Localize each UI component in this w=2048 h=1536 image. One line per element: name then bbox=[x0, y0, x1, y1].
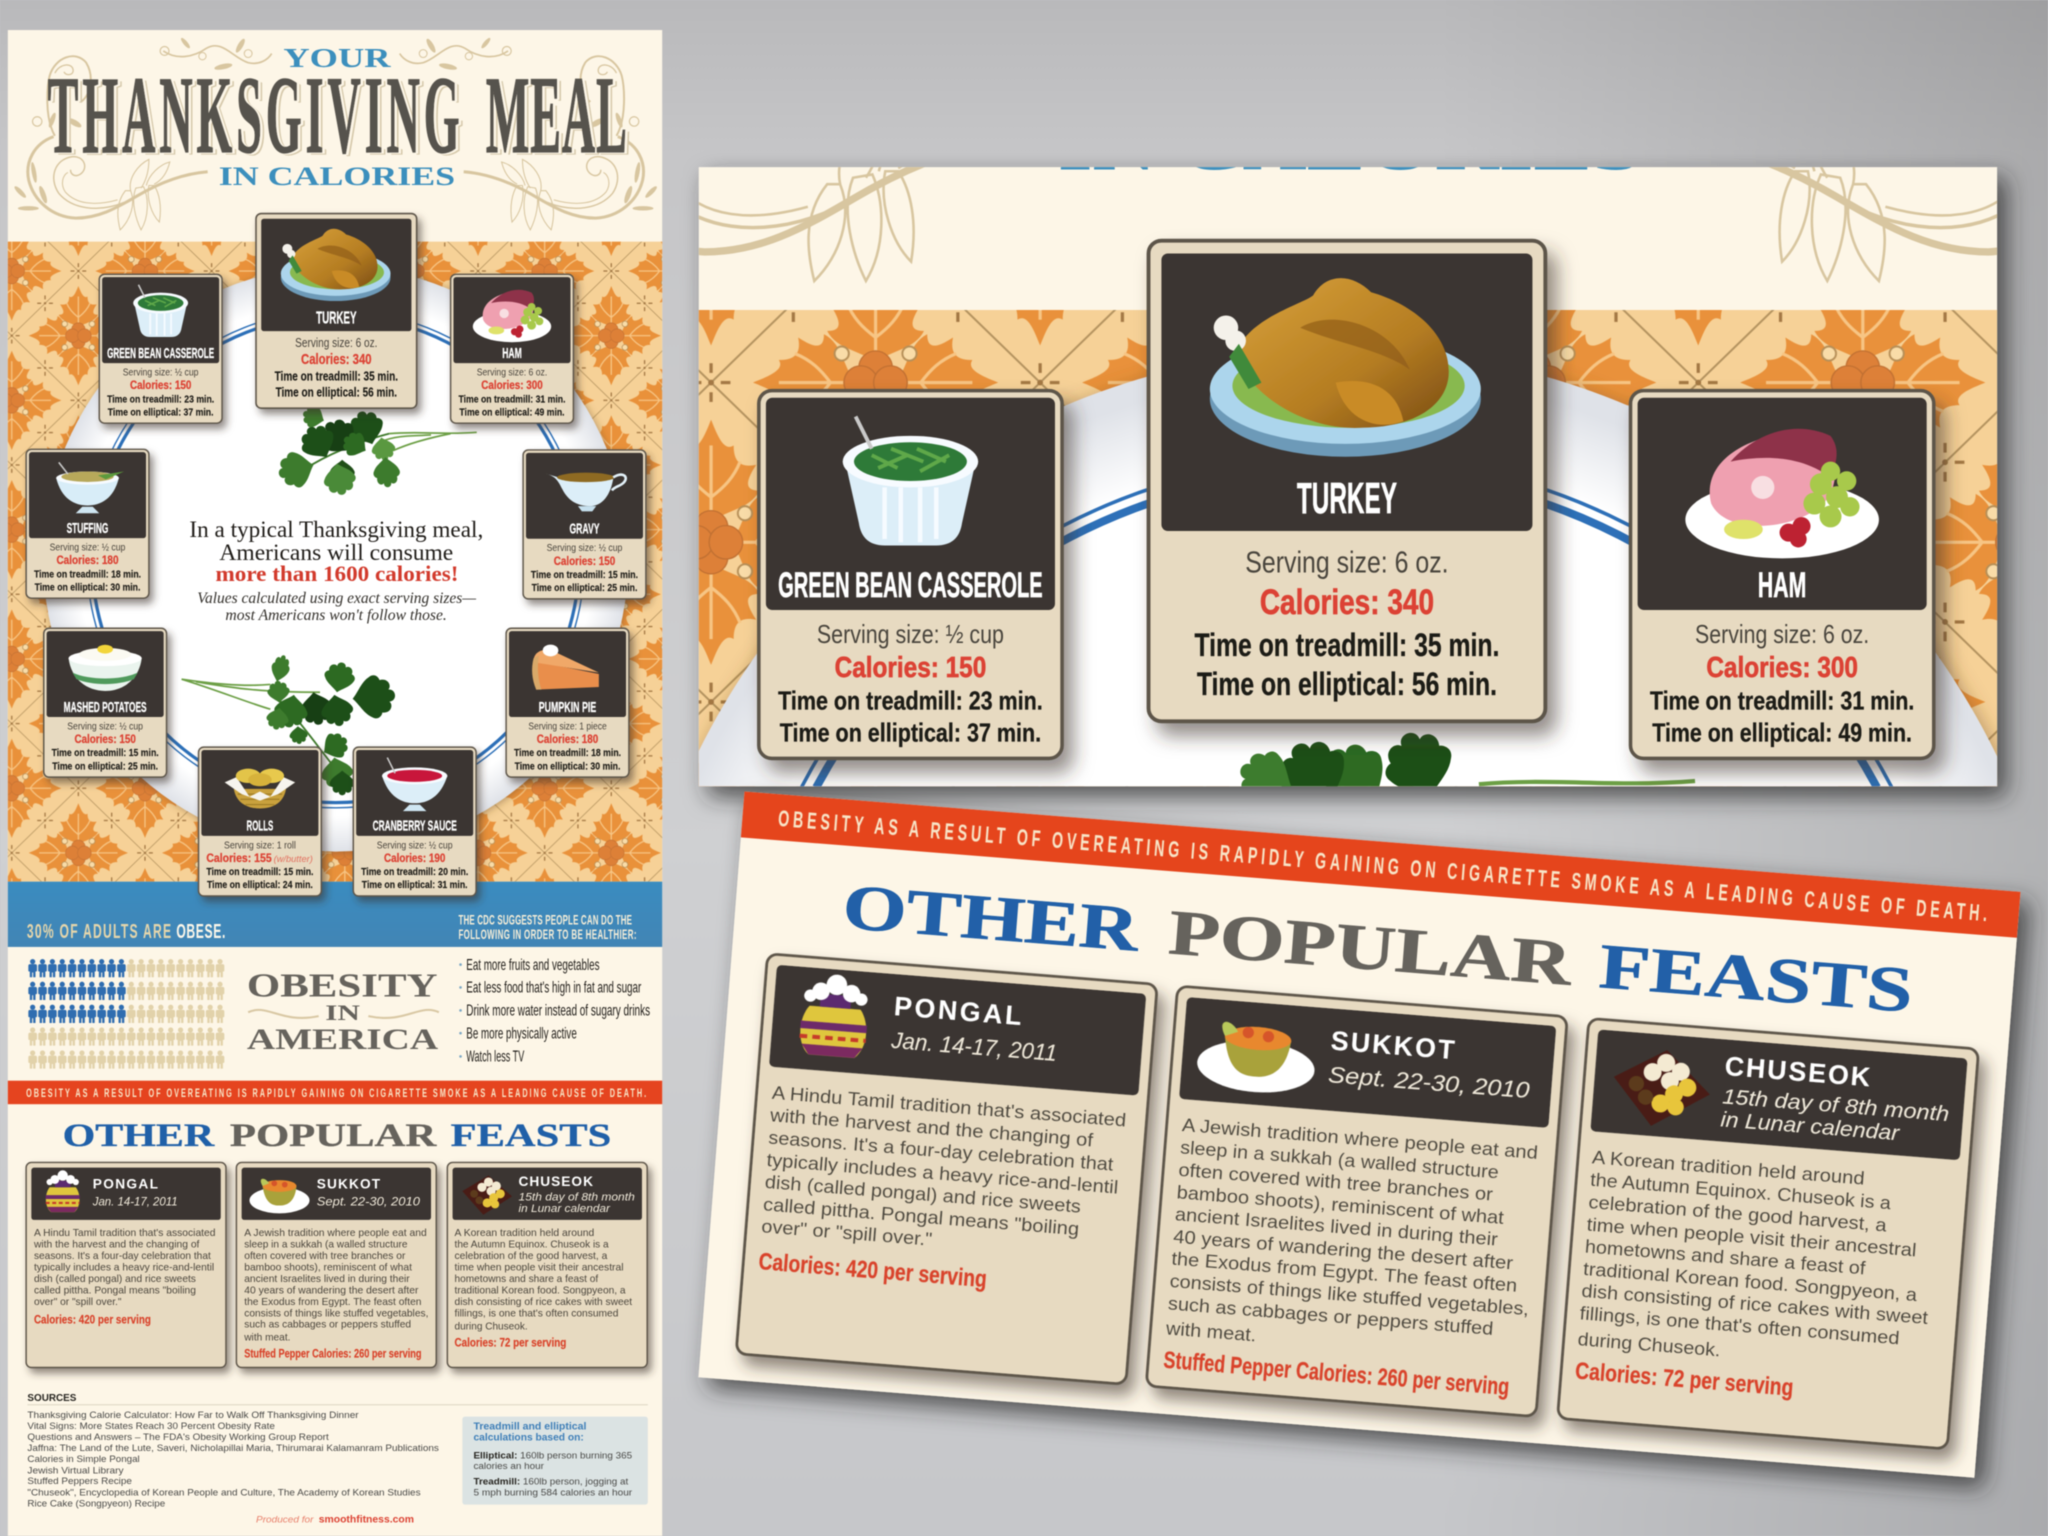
feast card: pongal: seasons. It's a four-day celebration that bbox=[34, 1251, 211, 1262]
feast card: pongal: dish (called pongal) and rice sweets bbox=[34, 1274, 196, 1285]
credit: smoothfitness.com bbox=[319, 1514, 414, 1525]
card: mashed potatoes: Time on elliptical: 25 min. bbox=[52, 761, 158, 772]
credit bbox=[256, 1514, 414, 1525]
sources: Jaffna: The Land of the Lute, Saveri, Nicholapillai Maria, Thirumarai Kalamanram Publications bbox=[27, 1442, 439, 1453]
card: gravy: GRAVY bbox=[569, 522, 600, 538]
list: CDC suggestions: Be more physically active bbox=[466, 1025, 577, 1042]
icon: pongal pot bbox=[46, 1170, 80, 1212]
card: turkey: Serving size: 6 oz. bbox=[1245, 544, 1449, 579]
feast card: sukkot: Sept. 22-30, 2010 bbox=[317, 1196, 420, 1209]
card: green bean casserole: Calories: 150 bbox=[835, 652, 986, 684]
list: CDC suggestions: Watch less TV bbox=[466, 1049, 525, 1066]
feast card: sukkot: often covered with tree branches or bbox=[1178, 1160, 1494, 1205]
feast card: sukkot bbox=[1146, 986, 1567, 1417]
card: turkey: Serving size: 6 oz. bbox=[295, 336, 377, 350]
callout: calculation basis: calories an hour bbox=[473, 1461, 544, 1471]
heading: obesity in america: AMERICA bbox=[247, 1023, 439, 1056]
card: green bean casserole: Serving size: ½ cup bbox=[817, 621, 1004, 649]
feast card: pongal bbox=[736, 954, 1157, 1384]
card: pumpkin pie bbox=[506, 628, 629, 777]
feast card: pongal: called pittha. Pongal means "boiling bbox=[34, 1285, 196, 1296]
feast card: sukkot: with meat. bbox=[1164, 1319, 1257, 1347]
feast card: sukkot: ancient Israelites lived in during their bbox=[244, 1274, 411, 1285]
panel: zoomed meal cards bbox=[690, 160, 2024, 815]
feast card: sukkot: Stuffed Pepper Calories: 260 per serving bbox=[244, 1347, 421, 1361]
feast card: chuseok bbox=[447, 1162, 647, 1368]
card: ham: Calories: 300 bbox=[481, 379, 543, 392]
card: ham: Time on treadmill: 31 min. bbox=[1650, 687, 1914, 715]
callout: calculation basis bbox=[462, 1417, 648, 1505]
card: turkey: Time on elliptical: 56 min. bbox=[1197, 666, 1497, 702]
icon: casserole bbox=[133, 285, 188, 337]
card: mashed potatoes bbox=[44, 628, 167, 777]
feast card: sukkot: Sept. 22-30, 2010 bbox=[1327, 1061, 1531, 1103]
card: ham: HAM bbox=[1758, 565, 1806, 605]
red banner bbox=[8, 1081, 662, 1104]
icon: stuffed pepper bbox=[249, 1179, 310, 1213]
card: gravy: Serving size: ½ cup bbox=[547, 543, 623, 554]
feast card: pongal: over" or "spill over." bbox=[761, 1217, 933, 1251]
card: pumpkin pie: Calories: 180 bbox=[537, 733, 599, 746]
card: stuffing: Calories: 180 bbox=[56, 554, 119, 567]
card: gravy: Time on treadmill: 15 min. bbox=[531, 570, 638, 581]
card: pumpkin pie: Time on elliptical: 30 min. bbox=[515, 761, 620, 772]
feast card: sukkot: sleep in a sukkah (a walled structure bbox=[1179, 1137, 1499, 1183]
card: ham: HAM bbox=[502, 346, 522, 362]
card: rolls: Calories: 155 bbox=[206, 852, 272, 865]
card: ham: Time on elliptical: 49 min. bbox=[459, 407, 565, 418]
card: turkey: Time on treadmill: 35 min. bbox=[275, 369, 398, 384]
pictogram: 30 of 100 adults bbox=[28, 959, 224, 1069]
red banner: OBESITY AS A RESULT OF OVEREATING IS RAPIDLY GAINING ON CIGARETTE SMOKE AS A LEADING CAUSE OF DEATH. bbox=[26, 1087, 646, 1100]
center message: more than 1600 calories! bbox=[216, 561, 458, 586]
title: YOUR bbox=[283, 43, 392, 73]
icon: pongal pot bbox=[798, 972, 871, 1059]
card: cranberry sauce: Serving size: ½ cup bbox=[377, 840, 453, 851]
card: turkey: Calories: 340 bbox=[301, 352, 372, 368]
feast card: chuseok: 15th day of 8th month bbox=[1722, 1084, 1950, 1126]
feast card: chuseok: CHUSEOK bbox=[519, 1174, 593, 1189]
feast card: sukkot: with meat. bbox=[243, 1333, 290, 1344]
blue band bbox=[8, 882, 662, 947]
card: stuffing: STUFFING bbox=[67, 521, 108, 537]
card: turkey bbox=[256, 214, 417, 408]
feast card: chuseok: 15th day of 8th month bbox=[519, 1191, 635, 1203]
callout: calculation basis: Treadmill: 160lb person, jogging at bbox=[473, 1477, 629, 1487]
feast card: chuseok: CHUSEOK bbox=[1724, 1051, 1872, 1093]
card: pumpkin pie: PUMPKIN PIE bbox=[539, 700, 596, 716]
card: ham: Serving size: 6 oz. bbox=[1695, 621, 1869, 649]
callout: calculation basis: Elliptical: 160lb person burning 365 bbox=[473, 1450, 632, 1460]
icon: casserole bbox=[843, 416, 978, 546]
feast card: sukkot: bamboo shoots), reminiscent of what bbox=[244, 1263, 412, 1274]
parsley top bbox=[274, 403, 477, 498]
feast card: chuseok: the Autumn Equinox. Chuseok is a bbox=[1590, 1170, 1892, 1214]
obesity band text bbox=[27, 913, 636, 943]
feast card: sukkot bbox=[236, 1162, 436, 1368]
feast card: chuseok: time when people visit their ancestral bbox=[1586, 1214, 1917, 1261]
feast card: chuseok: during Chuseok. bbox=[455, 1322, 528, 1333]
feast card: pongal: seasons. It's a four-day celebration that bbox=[768, 1127, 1115, 1176]
feast card: pongal: typically includes a heavy rice-and-lentil bbox=[766, 1150, 1119, 1198]
card: green bean casserole: GREEN BEAN CASSEROLE bbox=[107, 346, 214, 362]
panel: full infographic bbox=[8, 30, 662, 1536]
card: ham: Serving size: 6 oz. bbox=[477, 368, 547, 379]
feast card: pongal: A Hindu Tamil tradition that's associated bbox=[771, 1083, 1127, 1131]
heading: other popular feasts: POPULAR bbox=[1166, 896, 1575, 999]
card: rolls: (w/butter) bbox=[274, 854, 313, 864]
feast card: pongal: typically includes a heavy rice-and-lentil bbox=[34, 1263, 214, 1274]
feast card: chuseok bbox=[1558, 1018, 1979, 1449]
icon: ham bbox=[1685, 429, 1879, 558]
feast card: sukkot: SUKKOT bbox=[317, 1177, 381, 1192]
heading: other popular feasts bbox=[63, 1118, 611, 1154]
feast card: sukkot: often covered with tree branches or bbox=[244, 1251, 406, 1262]
heading: other popular feasts: OTHER bbox=[840, 871, 1142, 965]
card: green bean casserole: Calories: 150 bbox=[130, 379, 192, 392]
feast card: chuseok: fillings, is one that's often consumed bbox=[455, 1308, 618, 1319]
card: cranberry sauce bbox=[353, 747, 476, 896]
feast card: pongal: over" or "spill over." bbox=[34, 1297, 122, 1308]
feast card: chuseok: the Autumn Equinox. Chuseok is a bbox=[455, 1240, 609, 1251]
card: green bean casserole bbox=[99, 274, 222, 423]
card: green bean casserole: GREEN BEAN CASSEROLE bbox=[778, 565, 1043, 605]
icon: rice cakes bbox=[1610, 1046, 1713, 1130]
card: rolls: Serving size: 1 roll bbox=[224, 840, 296, 851]
feast card: chuseok: A Korean tradition held around bbox=[1591, 1147, 1865, 1190]
card: green bean casserole bbox=[759, 391, 1062, 758]
feast card: pongal: PONGAL bbox=[93, 1177, 158, 1192]
center message: most Americans won't follow those. bbox=[225, 607, 447, 624]
callout: calculation basis: Treadmill and elliptical bbox=[473, 1421, 586, 1432]
feast card: sukkot: SUKKOT bbox=[1330, 1025, 1456, 1065]
center message: In a typical Thanksgiving meal, bbox=[189, 517, 483, 542]
feast card: chuseok: time when people visit their ancestral bbox=[455, 1263, 624, 1274]
center message: Americans will consume bbox=[219, 540, 453, 565]
feast card: sukkot: bamboo shoots), reminiscent of what bbox=[1176, 1182, 1505, 1229]
parsley bbox=[1240, 732, 1696, 788]
card: green bean casserole: Time on treadmill: 23 min. bbox=[107, 394, 214, 405]
card: cranberry sauce: CRANBERRY SAUCE bbox=[373, 819, 457, 835]
feast card: chuseok: dish consisting of rice cakes with sweet bbox=[455, 1297, 632, 1308]
feast card: pongal: called pittha. Pongal means "boiling bbox=[762, 1194, 1080, 1240]
plate bbox=[43, 266, 628, 852]
card: mashed potatoes: Calories: 150 bbox=[74, 733, 136, 746]
list: CDC suggestions: Eat less food that's high in fat and sugar bbox=[466, 980, 641, 997]
list: CDC suggestions: Drink more water instead of sugary drinks bbox=[466, 1003, 650, 1020]
card: ham bbox=[1631, 391, 1934, 758]
sources: SOURCES bbox=[27, 1393, 77, 1404]
icon: turkey bbox=[281, 229, 391, 301]
feast card: chuseok: Calories: 72 per serving bbox=[1574, 1358, 1794, 1402]
icon: turkey bbox=[1210, 278, 1481, 457]
feast card: chuseok: Calories: 72 per serving bbox=[455, 1336, 566, 1350]
feast card: pongal: dish (called pongal) and rice sweets bbox=[764, 1172, 1082, 1218]
feast card: sukkot: consists of things like stuffed vegetables, bbox=[1169, 1271, 1530, 1320]
icon: gravy bbox=[545, 473, 626, 511]
sources: Stuffed Peppers Recipe bbox=[27, 1475, 132, 1486]
feast card: pongal bbox=[26, 1162, 226, 1368]
feast card: chuseok: during Chuseok. bbox=[1577, 1330, 1721, 1362]
wallpaper bbox=[8, 242, 662, 882]
feast card: chuseok: A Korean tradition held around bbox=[455, 1228, 594, 1239]
title: THANKSGIVING bbox=[48, 56, 460, 177]
header ornament bbox=[13, 37, 658, 230]
icon: rice cakes bbox=[462, 1176, 512, 1215]
panel: rotated feasts detail bbox=[698, 792, 2020, 1478]
card: gravy: Time on elliptical: 25 min. bbox=[532, 583, 637, 594]
feast card: sukkot: 40 years of wandering the desert after bbox=[1172, 1227, 1514, 1274]
card: green bean casserole: Time on elliptical: 37 min. bbox=[780, 720, 1041, 748]
parsley bottom bbox=[182, 653, 397, 795]
feast card: chuseok: fillings, is one that's often consumed bbox=[1579, 1304, 1900, 1350]
card: stuffing: Serving size: ½ cup bbox=[50, 543, 126, 554]
card: rolls bbox=[199, 747, 321, 896]
card: gravy bbox=[523, 450, 646, 599]
sources: Vital Signs: More States Reach 30 Percent Obesity Rate bbox=[27, 1420, 275, 1431]
icon: pumpkin pie bbox=[532, 645, 599, 690]
card: turkey: TURKEY bbox=[1297, 475, 1397, 523]
obesity band text: 30% OF ADULTS ARE bbox=[27, 920, 171, 943]
obesity band text: FOLLOWING IN ORDER TO BE HEALTHIER: bbox=[458, 928, 636, 943]
card: rolls: Time on treadmill: 15 min. bbox=[206, 867, 314, 878]
feast card: pongal: with the harvest and the changing of bbox=[33, 1240, 200, 1251]
feast card: pongal: Jan. 14-17, 2011 bbox=[890, 1027, 1058, 1066]
feast card: sukkot: ancient Israelites lived in during their bbox=[1174, 1204, 1499, 1251]
red banner: OBESITY AS A RESULT OF OVEREATING IS RAPIDLY GAINING ON CIGARETTE SMOKE AS A LEADING CAUSE OF DEATH. bbox=[777, 807, 1988, 927]
feast card: sukkot: such as cabbages or peppers stuffed bbox=[244, 1320, 411, 1331]
card: pumpkin pie: Time on treadmill: 18 min. bbox=[514, 748, 621, 759]
sources: Rice Cake (Songpyeon) Recipe bbox=[27, 1497, 165, 1508]
title: MEAL bbox=[486, 56, 627, 177]
card: turkey: Calories: 340 bbox=[1260, 582, 1434, 622]
card: ham: Calories: 300 bbox=[1706, 652, 1858, 684]
heading: other popular feasts: POPULAR bbox=[230, 1118, 437, 1154]
card: cranberry sauce: Calories: 190 bbox=[384, 852, 446, 865]
feast card: chuseok: celebration of the good harvest, a bbox=[455, 1251, 608, 1262]
sources: Thanksgiving Calorie Calculator: How Far to Walk Off Thanksgiving Dinner bbox=[27, 1409, 359, 1420]
heading: other popular feasts: OTHER bbox=[63, 1118, 215, 1154]
feast card: chuseok: traditional Korean food. Songpyeon, a bbox=[1582, 1259, 1918, 1306]
card: stuffing: Time on treadmill: 18 min. bbox=[34, 569, 141, 580]
heading: other popular feasts bbox=[840, 871, 1916, 1026]
feast card: sukkot: the Exodus from Egypt. The feast often bbox=[244, 1297, 421, 1308]
in calories heading clipped: IN CALORIES bbox=[1058, 112, 1642, 185]
feast card: pongal: A Hindu Tamil tradition that's associated bbox=[34, 1228, 216, 1239]
callout: calculation basis: 5 mph burning 584 calories an hour bbox=[473, 1488, 632, 1498]
sources: Questions and Answers – The FDA's Obesity Working Group Report bbox=[27, 1431, 329, 1442]
feast card: sukkot: such as cabbages or peppers stuffed bbox=[1167, 1293, 1494, 1340]
list: CDC suggestions: Eat more fruits and vegetables bbox=[466, 957, 600, 974]
heading: other popular feasts: FEASTS bbox=[1597, 930, 1916, 1026]
icon: mashed potatoes bbox=[69, 645, 142, 691]
card: pumpkin pie: Serving size: 1 piece bbox=[528, 721, 607, 732]
card: turkey: Time on treadmill: 35 min. bbox=[1195, 627, 1499, 663]
card: ham: Time on treadmill: 31 min. bbox=[458, 394, 566, 405]
card: mashed potatoes: MASHED POTATOES bbox=[64, 700, 147, 716]
sources: "Chuseok", Encyclopedia of Korean People and Culture, The Academy of Korean Studies bbox=[27, 1487, 421, 1498]
center message: Values calculated using exact serving sizes— bbox=[197, 590, 476, 607]
card: mashed potatoes: Serving size: ½ cup bbox=[67, 721, 143, 732]
heading: obesity in america: IN bbox=[325, 1000, 360, 1025]
feast card: chuseok: in Lunar calendar bbox=[1720, 1107, 1901, 1145]
feast card: chuseok: in Lunar calendar bbox=[519, 1203, 611, 1215]
obesity band text: THE CDC SUGGESTS PEOPLE CAN DO THE bbox=[458, 913, 632, 928]
sources bbox=[27, 1393, 648, 1508]
card: ham bbox=[451, 274, 573, 423]
icon: stuffing bbox=[56, 462, 124, 513]
feast card: chuseok: traditional Korean food. Songpyeon, a bbox=[455, 1285, 626, 1296]
card: cranberry sauce: Time on elliptical: 31 min. bbox=[362, 880, 468, 891]
obesity band text: OBESE. bbox=[176, 920, 225, 943]
feast card: sukkot: consists of things like stuffed vegetables, bbox=[244, 1308, 428, 1319]
card: green bean casserole: Serving size: ½ cup bbox=[123, 368, 199, 379]
card: green bean casserole: Time on elliptical: 37 min. bbox=[108, 407, 214, 418]
feast card: pongal: Calories: 420 per serving bbox=[34, 1313, 151, 1327]
card: stuffing bbox=[26, 449, 149, 598]
feast card: pongal: Calories: 420 per serving bbox=[758, 1248, 988, 1293]
icon: ham bbox=[473, 290, 551, 342]
feast card: sukkot: A Jewish tradition where people eat and bbox=[1181, 1115, 1539, 1164]
card: turkey: Time on elliptical: 56 min. bbox=[276, 384, 397, 399]
card: ham: Time on elliptical: 49 min. bbox=[1652, 720, 1912, 748]
credit: Produced for bbox=[256, 1514, 315, 1524]
heading: obesity in america bbox=[247, 968, 439, 1056]
feast card: chuseok: celebration of the good harvest, a bbox=[1588, 1192, 1888, 1236]
heading: obesity in america: OBESITY bbox=[247, 968, 438, 1005]
feast card: chuseok: hometowns and share a feast of bbox=[455, 1274, 599, 1285]
feast card: sukkot: A Jewish tradition where people eat and bbox=[244, 1228, 427, 1239]
card: green bean casserole: Time on treadmill: 23 min. bbox=[778, 687, 1043, 715]
feast card: pongal: with the harvest and the changing of bbox=[768, 1105, 1095, 1151]
feast card: chuseok: hometowns and share a feast of bbox=[1584, 1237, 1867, 1280]
card: mashed potatoes: Time on treadmill: 15 min. bbox=[52, 748, 159, 759]
card: rolls: ROLLS bbox=[247, 819, 274, 835]
card: turkey: TURKEY bbox=[316, 307, 357, 327]
card: gravy: Calories: 150 bbox=[554, 555, 616, 568]
icon: cranberry sauce bbox=[382, 758, 447, 811]
title: IN CALORIES bbox=[219, 161, 455, 191]
sources: Jewish Virtual Library bbox=[27, 1464, 124, 1475]
sources: Calories in Simple Pongal bbox=[27, 1453, 140, 1464]
icon: rolls bbox=[225, 769, 295, 808]
feast card: chuseok: dish consisting of rice cakes with sweet bbox=[1581, 1281, 1930, 1329]
feast card: sukkot: 40 years of wandering the desert after bbox=[244, 1285, 419, 1296]
card: stuffing: Time on elliptical: 30 min. bbox=[35, 582, 140, 593]
plate bbox=[682, 349, 2011, 787]
callout: calculation basis: calculations based on: bbox=[473, 1433, 584, 1444]
card: cranberry sauce: Time on treadmill: 20 min. bbox=[361, 867, 468, 878]
icon: stuffed pepper bbox=[1195, 1020, 1318, 1097]
feast card: sukkot: the Exodus from Egypt. The feast often bbox=[1171, 1249, 1518, 1297]
feast card: sukkot: sleep in a sukkah (a walled structure bbox=[244, 1240, 408, 1251]
center message bbox=[189, 517, 483, 624]
title bbox=[48, 43, 627, 191]
card: turkey bbox=[1149, 241, 1545, 721]
heading: other popular feasts: FEASTS bbox=[451, 1118, 611, 1154]
card: rolls: Time on elliptical: 24 min. bbox=[207, 880, 313, 891]
feast card: pongal: PONGAL bbox=[893, 991, 1023, 1031]
list: CDC suggestions bbox=[459, 957, 650, 1066]
feast card: pongal: Jan. 14-17, 2011 bbox=[92, 1196, 178, 1209]
feast card: sukkot: Stuffed Pepper Calories: 260 per serving bbox=[1163, 1347, 1510, 1401]
